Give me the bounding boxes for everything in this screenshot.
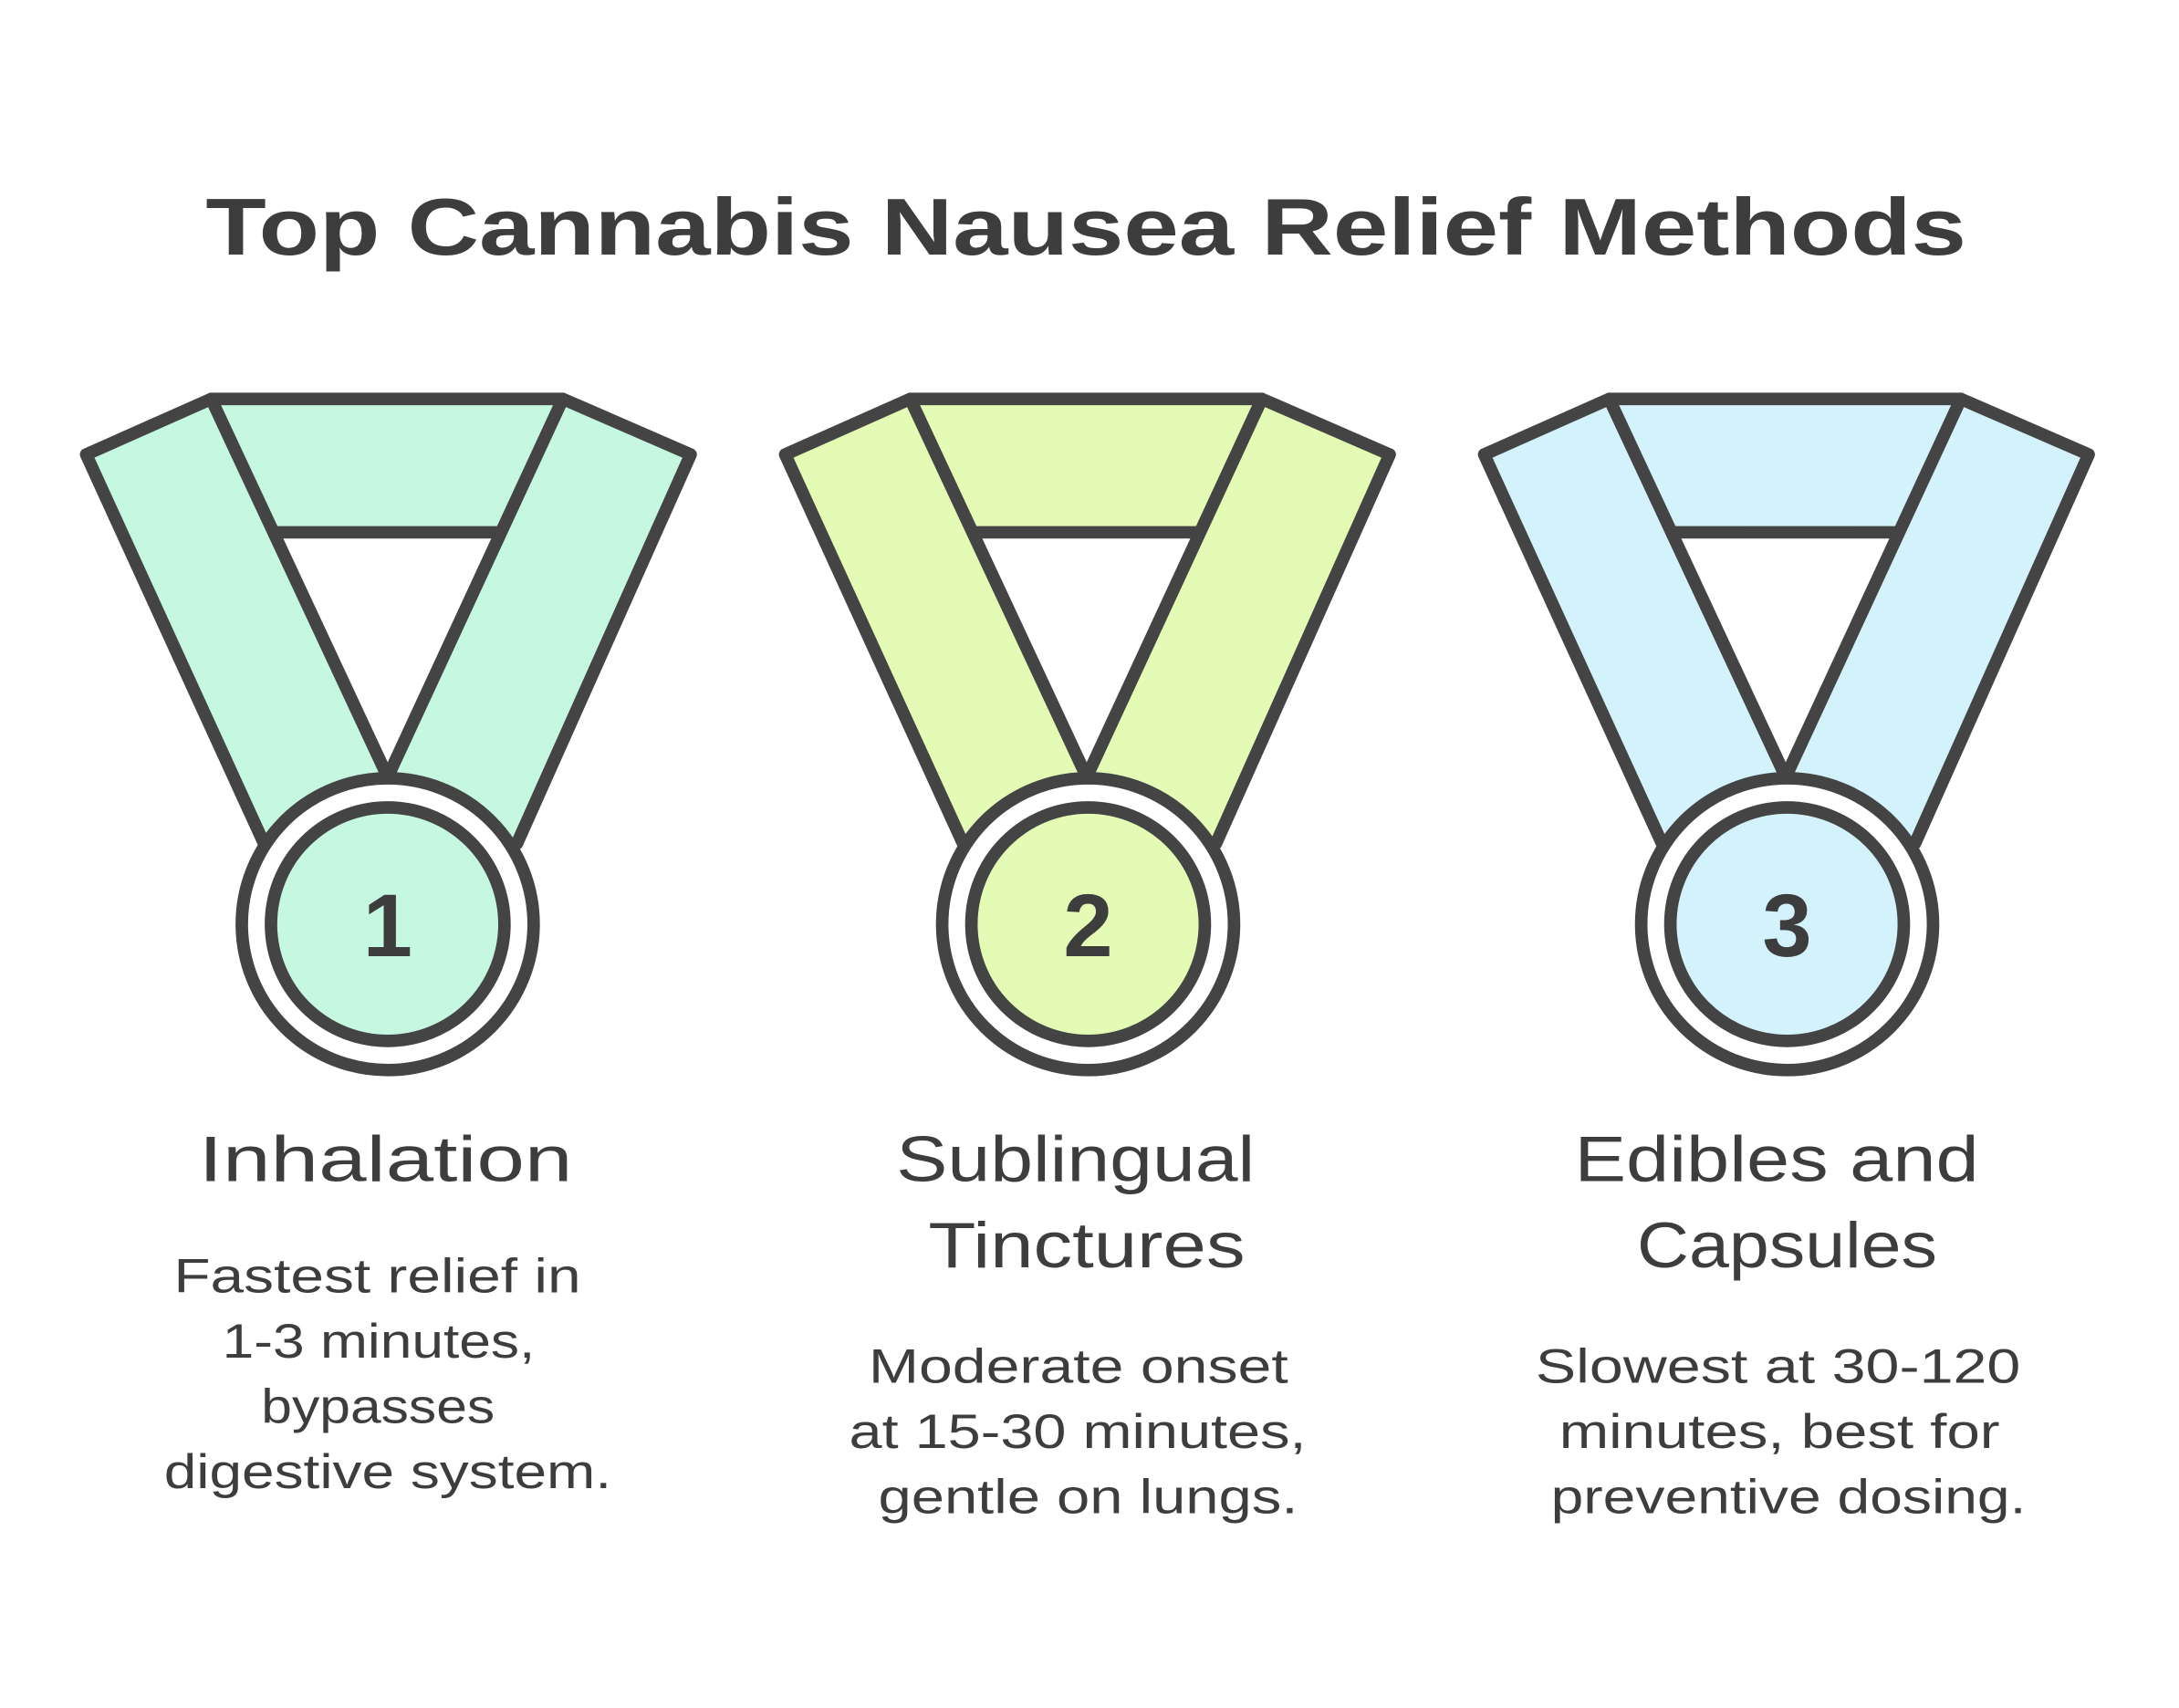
label: Edibles and <box>1575 1124 1979 1195</box>
description <box>1536 1339 2026 1525</box>
description: Slowest at 30-120 <box>1536 1339 2020 1393</box>
medal 3: Edibles and Capsules <box>1485 399 2089 1525</box>
medal circle with number 1: 1 <box>363 876 412 975</box>
title: Top Cannabis Nausea Relief Methods <box>205 182 1966 272</box>
description: bypasses <box>261 1380 495 1434</box>
medal circle with number 1 <box>242 778 534 1070</box>
description: preventive dosing. <box>1551 1471 2026 1525</box>
ribbon <box>86 399 691 844</box>
ribbon <box>1485 399 2089 844</box>
description <box>164 1249 611 1499</box>
medal 1: Inhalation <box>86 399 691 1499</box>
medal circle with number 2: 2 <box>1063 876 1113 975</box>
label <box>1575 1124 1979 1281</box>
medal circle with number 3: 3 <box>1762 876 1812 975</box>
description: minutes, best for <box>1559 1405 2000 1459</box>
description: Fastest relief in <box>173 1249 581 1303</box>
label: Capsules <box>1637 1210 1937 1281</box>
description: Moderate onset <box>869 1339 1288 1393</box>
medal 2: Sublingual Tinctures <box>785 399 1390 1525</box>
label: Sublingual <box>896 1124 1255 1195</box>
description: at 15-30 minutes, <box>850 1405 1307 1459</box>
description <box>850 1339 1307 1525</box>
label: Tinctures <box>928 1210 1246 1281</box>
ribbon <box>785 399 1390 844</box>
description: gentle on lungs. <box>879 1471 1298 1525</box>
medal circle with number 3 <box>1642 778 1933 1070</box>
label: Inhalation <box>199 1124 572 1195</box>
description: 1-3 minutes, <box>223 1315 535 1369</box>
medal circle with number 2 <box>943 778 1234 1070</box>
description: digestive system. <box>164 1445 611 1499</box>
label <box>896 1124 1255 1281</box>
